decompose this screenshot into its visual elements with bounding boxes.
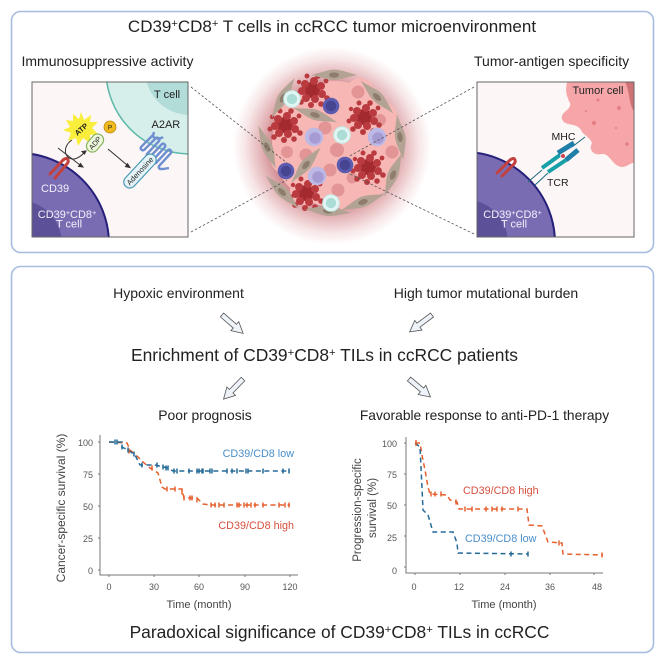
conclusion text: + bbox=[385, 624, 392, 636]
text: hypoxic environment: Hypoxic environment bbox=[113, 285, 244, 301]
y axis title line 2: survival (%) bbox=[367, 478, 379, 538]
chart: cancer-specific survival: 90 bbox=[240, 582, 250, 592]
icon: ATP burst: ATP bbox=[73, 121, 90, 137]
icon: ATP burst bbox=[63, 112, 98, 146]
censor marks: high bbox=[129, 448, 289, 508]
icon: adenosine: Adenosine bbox=[125, 155, 155, 187]
icon: A2AR receptor bbox=[141, 132, 171, 169]
icon: phosphate: P bbox=[108, 124, 112, 132]
curve: CD39/CD8 high bbox=[415, 443, 603, 555]
icon: TCR-MHC complex bbox=[528, 137, 585, 185]
illustration: tumor spheroid bbox=[233, 47, 431, 245]
title: CD39 bbox=[128, 17, 171, 36]
panel: clinical significance bbox=[12, 266, 654, 652]
heading: favorable response: Favorable response to anti-PD-1 therapy bbox=[360, 408, 609, 423]
conclusion text: + bbox=[426, 624, 433, 636]
chart: cancer-specific survival: 75 bbox=[83, 470, 93, 480]
panel: CD39+CD8+ T cells in tumor microenvironment bbox=[12, 12, 654, 252]
conclusion text: TILs in ccRCC bbox=[433, 622, 549, 642]
label: CD39/CD8 high: CD39/CD8 high bbox=[218, 520, 294, 532]
chart: cancer-specific survival bbox=[54, 434, 298, 611]
y axis title: Progression-specific bbox=[352, 458, 364, 562]
curve: CD39/CD8 high bbox=[109, 442, 290, 505]
chart: cancer-specific survival: 30 bbox=[149, 582, 159, 592]
censor marks: high bbox=[416, 440, 602, 558]
label: T cell: T cell bbox=[154, 89, 180, 101]
curve: CD39/CD8 low bbox=[415, 443, 528, 554]
chart: cancer-specific survival: 50 bbox=[83, 502, 93, 512]
x axis title: Time (month) bbox=[472, 599, 536, 611]
title: CD8 bbox=[178, 17, 212, 36]
icon: phosphate bbox=[104, 121, 116, 133]
label: CD39+CD8+ T cell right: + bbox=[511, 209, 516, 217]
zoom guide lines bbox=[191, 87, 474, 234]
label: CD39+CD8+ T cell right: CD8 bbox=[516, 209, 538, 221]
heading: tumor-antigen specificity: Tumor-antigen specificity bbox=[474, 53, 629, 69]
chart: progression-specific survival: 0 bbox=[411, 582, 417, 592]
label: CD39+CD8+ T cell left: CD8 bbox=[70, 209, 92, 221]
chart: cancer-specific survival: 100 bbox=[78, 438, 93, 448]
label: CD39/CD8 low: CD39/CD8 low bbox=[465, 533, 537, 545]
heading: enrichment: TILs in ccRCC patients bbox=[336, 345, 518, 365]
conclusion text: Paradoxical significance of CD39 bbox=[130, 622, 385, 642]
chart: progression-specific survival: 24 bbox=[500, 582, 510, 592]
icon: ADP pill bbox=[84, 131, 106, 155]
heading: enrichment: CD8 bbox=[294, 345, 329, 365]
label: CD39: CD39 bbox=[41, 183, 69, 195]
chart: progression-specific survival bbox=[352, 437, 603, 611]
panel: immunosuppressive inset bbox=[32, 82, 188, 238]
chart: progression-specific survival: 12 bbox=[454, 582, 464, 592]
icon: CD39 receptor bbox=[497, 158, 515, 176]
chart: progression-specific survival: 25 bbox=[387, 533, 397, 543]
x axis title: Time (month) bbox=[166, 599, 232, 611]
icon: adenosine bbox=[121, 152, 159, 190]
y axis title: Cancer-specific survival (%) bbox=[54, 434, 68, 582]
label: CD39+CD8+ T cell left: T cell bbox=[56, 218, 82, 230]
chart: progression-specific survival: 50 bbox=[387, 501, 397, 511]
arrow: enrichment to favorable response bbox=[405, 374, 434, 402]
heading: enrichment: + bbox=[329, 347, 336, 359]
chart: progression-specific survival: 36 bbox=[545, 582, 555, 592]
arrow: mutational burden to enrichment bbox=[406, 310, 436, 337]
label: CD39/CD8 low: CD39/CD8 low bbox=[223, 448, 294, 460]
chart: progression-specific survival: 48 bbox=[592, 582, 602, 592]
chart: progression-specific survival: 75 bbox=[387, 470, 397, 480]
label: CD39+CD8+ T cell right: T cell bbox=[501, 218, 527, 230]
label: TCR: TCR bbox=[547, 177, 569, 189]
heading: immunosuppressive activity: Immunosuppressive activity bbox=[22, 53, 193, 69]
curve: CD39/CD8 low bbox=[109, 442, 290, 471]
title: + bbox=[171, 18, 178, 30]
chart: progression-specific survival: 0 bbox=[392, 566, 397, 576]
label: CD39+CD8+ T cell right: + bbox=[538, 209, 542, 217]
label: CD39+CD8+ T cell left: + bbox=[66, 209, 70, 217]
chart: cancer-specific survival: 120 bbox=[282, 582, 298, 592]
censor marks: low bbox=[115, 440, 289, 474]
chart: progression-specific survival: 100 bbox=[382, 439, 397, 449]
arrow: hypoxia to enrichment bbox=[218, 310, 247, 338]
text: high tumor mutational burden: High tumor mutational burden bbox=[394, 285, 578, 301]
chart: cancer-specific survival: 60 bbox=[194, 582, 204, 592]
panel: tumor-antigen inset bbox=[476, 82, 634, 238]
label: CD39/CD8 high: CD39/CD8 high bbox=[463, 485, 539, 497]
label: CD39+CD8+ T cell left: CD39 bbox=[38, 209, 66, 221]
label: MHC: MHC bbox=[552, 131, 576, 143]
label: CD39+CD8+ T cell right: CD39 bbox=[483, 209, 511, 221]
arrow: enrichment to poor prognosis bbox=[219, 375, 247, 403]
heading: poor prognosis: Poor prognosis bbox=[158, 407, 252, 423]
label: tumor cell: Tumor cell bbox=[572, 85, 623, 97]
title: + bbox=[212, 18, 218, 30]
chart: cancer-specific survival: 0 bbox=[88, 566, 93, 576]
icon: CD39 receptor bbox=[50, 158, 68, 178]
heading: enrichment: Enrichment of CD39 bbox=[131, 345, 288, 365]
title: T cells in ccRCC tumor microenvironment bbox=[218, 17, 536, 36]
conclusion text: CD8 bbox=[391, 622, 426, 642]
icon: ADP pill: ADP bbox=[87, 134, 103, 152]
chart: cancer-specific survival: 25 bbox=[83, 534, 93, 544]
arrows: ATP hydrolysis and adenosine formation bbox=[58, 140, 130, 168]
label: A2AR: A2AR bbox=[152, 119, 180, 131]
label: CD39+CD8+ T cell left: + bbox=[92, 209, 96, 217]
heading: enrichment: + bbox=[288, 347, 295, 359]
chart: cancer-specific survival: 0 bbox=[106, 582, 112, 592]
censor marks: low bbox=[511, 552, 528, 556]
